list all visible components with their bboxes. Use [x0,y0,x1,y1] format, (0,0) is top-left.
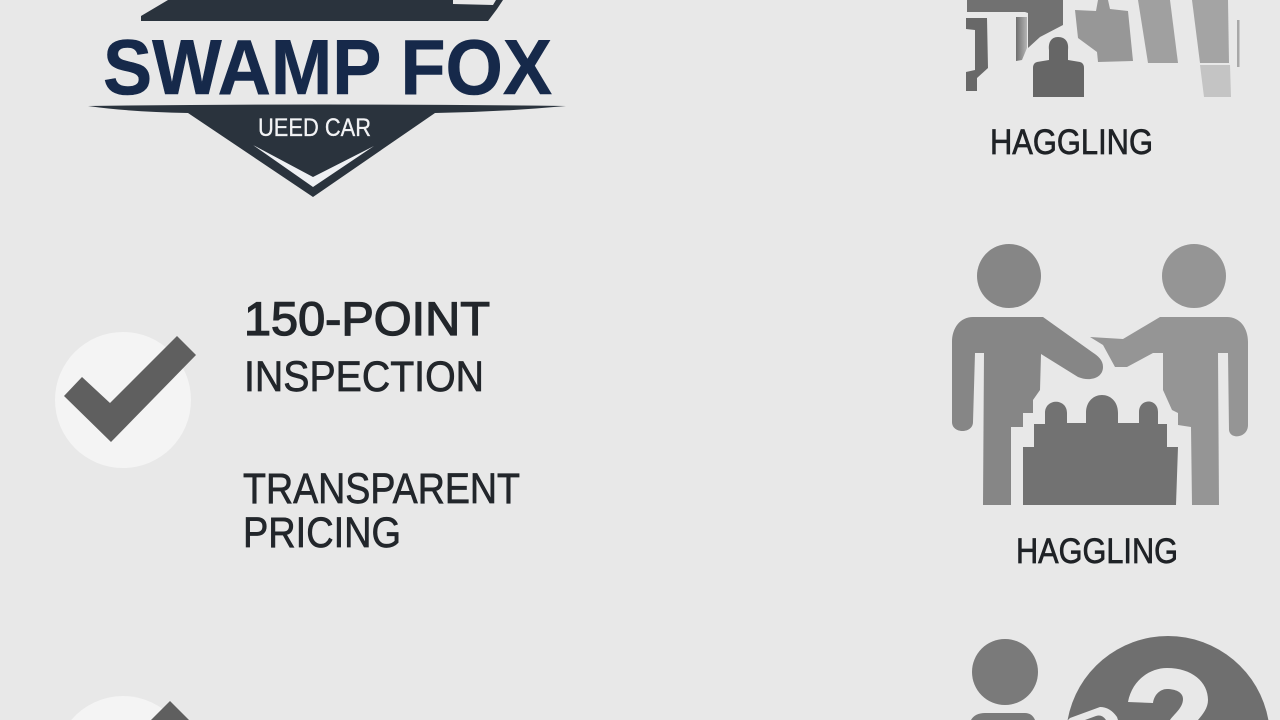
logo wordmark: SWAMP FOX [103,23,552,111]
icon: two people haggling over a box [952,244,1248,505]
dark upper band [967,0,1063,48]
label: haggling middle: HAGGLING [1016,532,1178,571]
check item: 150-point inspection [55,332,196,468]
check mark icon [151,701,189,720]
light panel three [1192,0,1229,63]
hand outline [1068,707,1118,720]
line: transparent: TRANSPARENT [243,465,520,513]
text block: 150-point inspection [244,292,490,401]
logo subtitle: UEED CAR [258,114,371,142]
narrow gradient piece [1016,17,1027,61]
right person body [1090,317,1248,505]
person shoulders [971,713,1035,720]
check badge circle [71,696,175,720]
left bracket piece [966,18,988,91]
logo chevron [253,145,374,187]
logo car silhouette [141,0,503,21]
light panel two [1138,0,1178,63]
label: haggling top: HAGGLING [990,123,1153,162]
check badge circle [55,332,191,468]
light panel one [1075,0,1133,62]
check mark icon [64,336,196,442]
question bubble [1068,636,1268,720]
question mark [1128,668,1208,720]
thin side bar [1237,20,1240,67]
logo shield [88,104,566,197]
subheading: inspection: INSPECTION [244,353,484,401]
text block: transparent pricing [243,465,520,557]
left person body [952,317,1103,505]
pale lower panel [1200,65,1231,97]
line: pricing: PRICING [243,509,401,557]
logo: Swamp Fox Used Car [88,0,566,197]
box with three rounded tabs [1023,395,1178,505]
icon: person with question mark [971,636,1268,720]
check item: partial badge at bottom [71,696,189,720]
right head [1162,244,1226,308]
person head [972,639,1038,705]
left head [977,244,1041,308]
heading: 150-point: 150-POINT [244,292,490,345]
small person [1033,37,1084,97]
icon: cropped haggling group [966,0,1240,97]
